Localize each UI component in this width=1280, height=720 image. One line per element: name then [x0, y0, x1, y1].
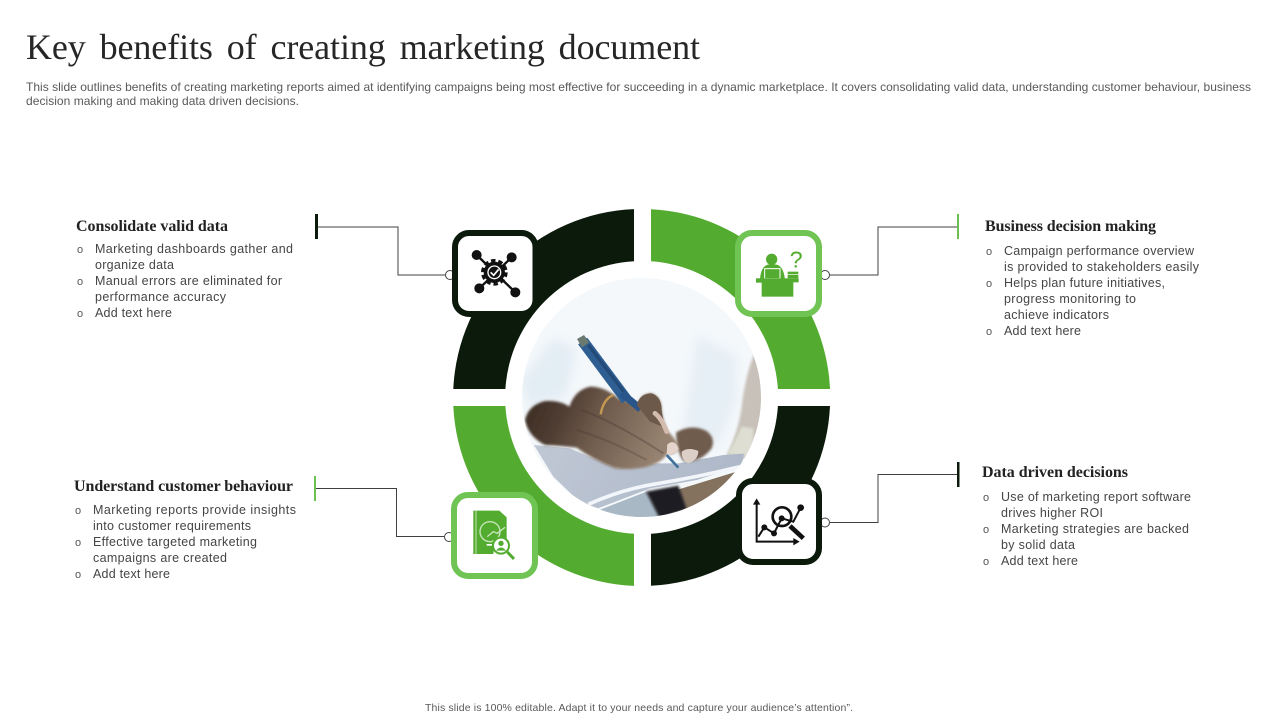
icon tile: person at desk with question mark: ?	[790, 247, 803, 273]
bullet list: o	[75, 537, 81, 549]
icon tile: report with lightbulb and magnifier	[454, 495, 535, 576]
bullet list: o	[77, 244, 83, 256]
description text: This slide outlines benefits of creating marketing reports aimed at identifying campaigns being most effective for succeeding in a dynamic marketplace. It covers consolidating valid data, understanding customer behaviour, business	[26, 80, 1251, 94]
pen tip	[667, 455, 678, 468]
text block: understand customer behaviour	[74, 478, 296, 581]
bullet list: o	[983, 556, 989, 568]
text block: data driven decisions	[982, 464, 1191, 568]
bullet list: o	[986, 326, 992, 338]
pen upper	[583, 341, 627, 400]
heading: Business decision making	[985, 218, 1156, 235]
central photo: hand writing with a pen	[522, 278, 761, 517]
main hand	[525, 387, 678, 469]
description text	[26, 80, 1251, 108]
bullet list: Use of marketing report software	[1001, 490, 1191, 504]
ring segment: top right	[651, 209, 830, 389]
icon tile: chart with magnifier	[739, 481, 819, 562]
heading: Understand customer behaviour	[74, 478, 293, 495]
second hand	[676, 427, 713, 461]
bullet list: Marketing strategies are backed	[1001, 522, 1189, 536]
bullet list: o	[986, 278, 992, 290]
bullet list: o	[983, 524, 989, 536]
description text: decision making and making data driven decisions.	[26, 94, 299, 108]
bullet list: o	[77, 308, 83, 320]
bullet list: campaigns are created	[93, 551, 227, 565]
bullet list: Add text here	[1004, 324, 1081, 338]
bullet list: Effective targeted marketing	[93, 535, 257, 549]
connector: data driven decisions	[820, 462, 960, 527]
bullet list: o	[75, 569, 81, 581]
bullet list: Marketing dashboards gather and	[95, 242, 293, 256]
text block: consolidate valid data	[76, 218, 293, 320]
title: Key benefits of creating marketing document	[26, 27, 700, 67]
connector: understand customer behaviour	[314, 476, 454, 542]
paper	[534, 445, 744, 508]
bullet list: Manual errors are eliminated for	[95, 274, 282, 288]
bullet list: o	[986, 246, 992, 258]
icon tile: person at desk with question mark	[738, 233, 819, 314]
bullet list: achieve indicators	[1004, 308, 1109, 322]
heading: Data driven decisions	[982, 464, 1128, 481]
ring segment: bottom right	[651, 406, 830, 586]
bullet list: Helps plan future initiatives,	[1004, 276, 1165, 290]
heading: Consolidate valid data	[76, 218, 228, 235]
bullet list: Add text here	[95, 306, 172, 320]
bullet list: progress monitoring to	[1004, 292, 1136, 306]
footer note: This slide is 100% editable. Adapt it to your needs and capture your audience’s attention”.	[425, 702, 853, 714]
bullet list: Campaign performance overview	[1004, 244, 1195, 258]
ring segment: bottom left	[453, 406, 634, 586]
ring segment: top left	[453, 209, 634, 389]
bullet list: organize data	[95, 258, 174, 272]
bullet list: by solid data	[1001, 538, 1075, 552]
bullet list: o	[983, 492, 989, 504]
bullet list: Marketing reports provide insights	[93, 503, 296, 517]
bullet list: into customer requirements	[93, 519, 251, 533]
bullet list: Add text here	[1001, 554, 1078, 568]
bullet list: performance accuracy	[95, 290, 227, 304]
bullet list: Add text here	[93, 567, 170, 581]
index knuckle over pen	[636, 393, 664, 426]
bullet list: o	[77, 276, 83, 288]
bullet list: is provided to stakeholders easily	[1004, 260, 1200, 274]
bullet list	[77, 242, 293, 320]
bullet list: o	[75, 505, 81, 517]
connector: business decision making	[820, 214, 959, 280]
icon tile: network gear	[455, 233, 536, 314]
below paper	[676, 472, 735, 512]
bullet list: drives higher ROI	[1001, 506, 1103, 520]
bullet list	[75, 503, 296, 581]
text block: business decision making	[985, 218, 1200, 338]
connector: consolidate valid data	[315, 214, 454, 280]
bullet list	[986, 244, 1200, 338]
bullet list	[983, 490, 1191, 568]
